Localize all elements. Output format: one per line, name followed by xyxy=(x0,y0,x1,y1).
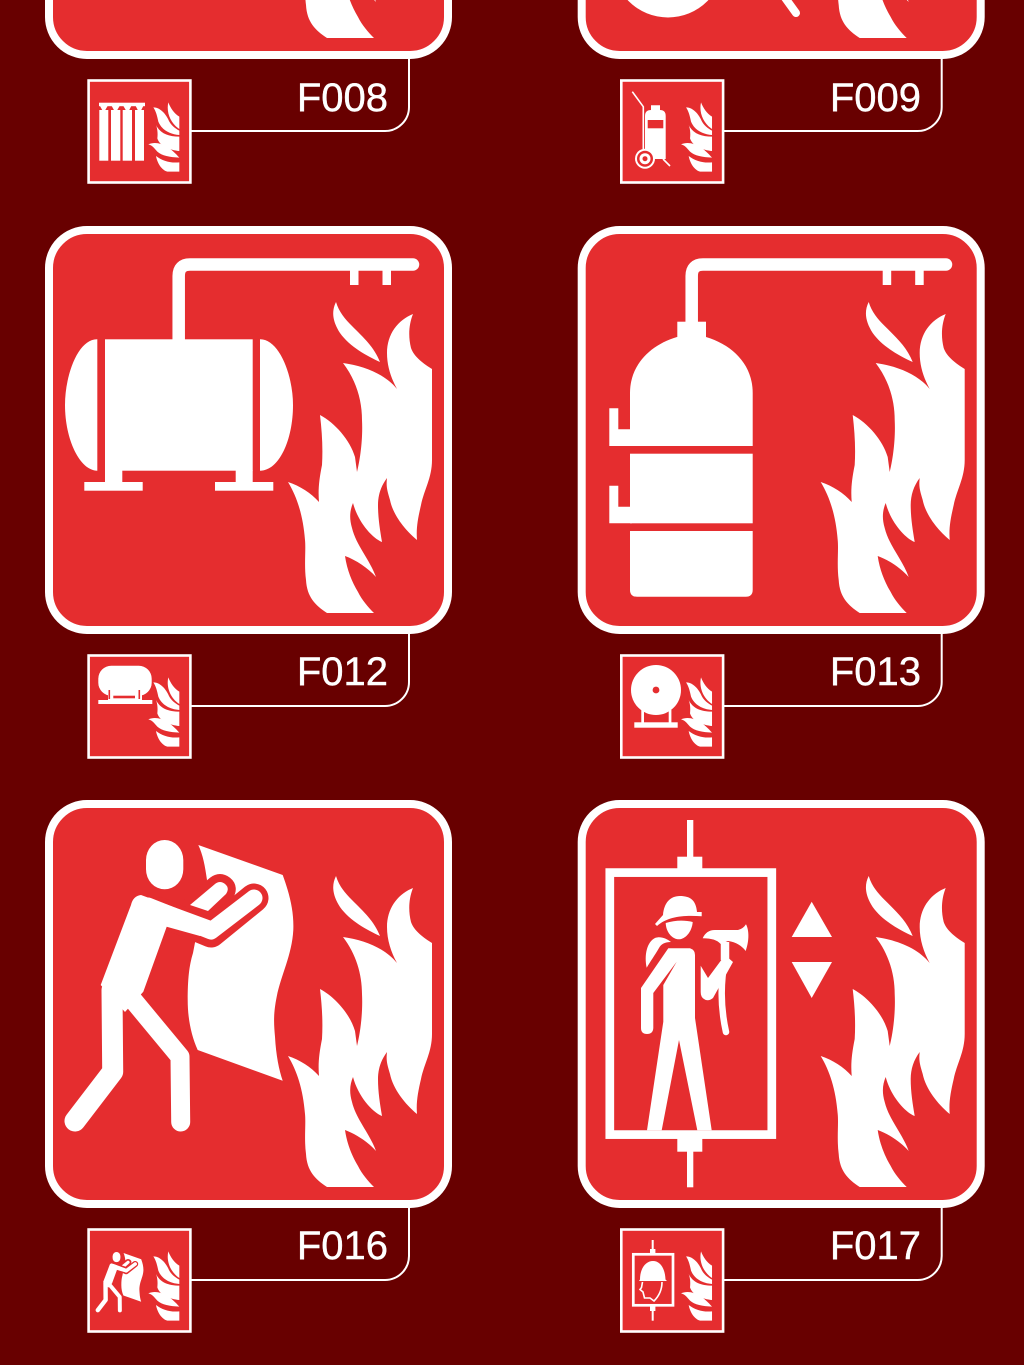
panel: F013 xyxy=(582,230,981,630)
label F013: F013 xyxy=(830,650,921,694)
sign card F009 xyxy=(582,0,981,55)
label F009: F009 xyxy=(830,76,921,120)
small icon: F012 tank xyxy=(89,656,190,758)
icon: flame xyxy=(821,876,965,1187)
sign card F016 xyxy=(49,804,448,1204)
panel: F017 xyxy=(582,804,981,1204)
connector line F009 xyxy=(724,59,942,131)
icon: flame xyxy=(821,302,965,613)
icon: F009 cropped handle xyxy=(783,0,796,13)
sign card F012 xyxy=(49,230,448,630)
small icon: F016 fire blanket xyxy=(89,1230,190,1332)
small icon: F017 firefighter lift xyxy=(621,1230,723,1332)
connector line F016 xyxy=(191,1208,409,1280)
icon: firefighter lift xyxy=(610,820,832,1187)
sign card F017 xyxy=(582,804,981,1204)
connector line F008 xyxy=(191,59,409,131)
label F016: F016 xyxy=(297,1224,388,1268)
panel: F009 xyxy=(582,0,981,55)
label F012: F012 xyxy=(297,650,388,694)
icon: F009 cropped wheel xyxy=(612,0,724,18)
sign card F013 xyxy=(582,230,981,630)
label F017: F017 xyxy=(830,1224,921,1268)
panel: F008 xyxy=(49,0,448,55)
connector line F013 xyxy=(724,634,942,706)
small icon: F009 wheeled extinguisher xyxy=(621,80,723,182)
panel: F012 xyxy=(49,230,448,630)
small icon: F008 gas cylinders xyxy=(89,80,190,182)
icon: horizontal tank with pipe xyxy=(65,264,413,491)
icon: flame xyxy=(288,302,432,613)
icon: person with fire blanket xyxy=(75,840,293,1122)
panel: F016 xyxy=(49,804,448,1204)
small icon: F013 cylinder end view xyxy=(621,656,723,758)
icon: flame xyxy=(821,0,965,38)
icon: flame xyxy=(288,876,432,1187)
icon: flame xyxy=(288,0,432,38)
label F008: F008 xyxy=(297,76,388,120)
connector line F017 xyxy=(724,1208,942,1280)
sign card F008 xyxy=(49,0,448,55)
connector line F012 xyxy=(191,634,409,706)
icon: gas cylinder with pipe xyxy=(609,264,946,597)
